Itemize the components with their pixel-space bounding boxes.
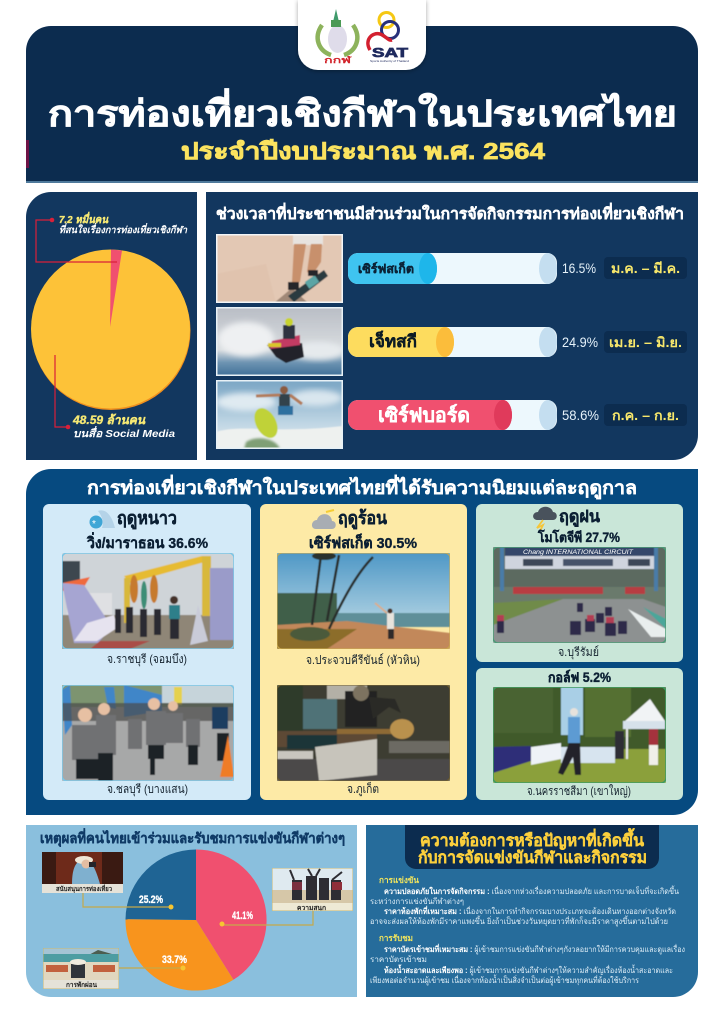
- bar: surf skate: [348, 253, 687, 284]
- text block: spectators: ราคาบัตรเข้าชมที่เหมาะสม : ผู้เข้าชมการแข่งขันกีฬาต่างๆกังวลอยากให้มีการควบคุมและดูแลเรื่อง: [384, 943, 685, 955]
- pie chart: social media interest: [31, 250, 190, 410]
- icon: SAT logo: Sports Authority of Thailand: [370, 59, 409, 63]
- bar: surfboard: 58.6%: [562, 408, 599, 423]
- card: winter: วิ่ง/มาราธอน 36.6%: [86, 532, 208, 552]
- card: summer: ฤดูร้อน: [338, 508, 388, 530]
- heading: เหตุผลที่คนไทยเข้าร่วมและรับชมการแข่งขันกีฬาต่างๆ: [40, 828, 345, 847]
- text block: competition: การแข่งขัน: [379, 875, 419, 885]
- photo: Chonburi marathon: [62, 685, 234, 781]
- title: การท่องเที่ยวเชิงกีฬาในประเทศไทย: [48, 88, 677, 134]
- bar: surf skate: เซิร์ฟสเก็ต: [358, 261, 414, 276]
- card: golf: จ.นครราชสีมา (เขาใหญ่): [527, 784, 631, 798]
- photo: Buriram circuit: [493, 547, 666, 643]
- photo: Phuket: [277, 685, 450, 781]
- bar: surfboard: ก.ค. – ก.ย.: [612, 408, 679, 423]
- card: summer: [260, 504, 467, 800]
- card: golf: [476, 668, 683, 800]
- callout: 7.2: ที่สนใจเรื่องการท่องเที่ยวเชิงกีฬา: [59, 223, 188, 236]
- callout: 7.2: [36, 211, 188, 262]
- callout: fun: 41.1%: [232, 910, 253, 922]
- callout: relaxation: การพักผ่อน: [66, 981, 97, 989]
- text block: competition: อาจจะส่งผลให้ห้องพักมีราคาแพงขึ้น ยิ่งถ้าเป็นช่วงวันหยุดยาวที่พักก็จะมีราคาสูงขึ้นตามไปด้วย: [370, 915, 668, 927]
- bar: jet ski: เม.ย. – มิ.ย.: [609, 335, 682, 350]
- photo: skateboard: [216, 234, 343, 303]
- text block: spectators: การรับชม: [379, 933, 413, 943]
- callout: relaxation: [43, 948, 187, 989]
- photo: Ratchaburi marathon: [62, 553, 234, 649]
- callout: tourism support: [42, 852, 174, 910]
- heading: กับการจัดแข่งขันกีฬาและกิจกรรม: [418, 848, 647, 867]
- card: rainy season, motoGP: ฤดูฝน: [559, 507, 600, 528]
- icon: SAT logo: SAT: [372, 46, 409, 60]
- callout: 48.59: 48.59 ล้านคน: [72, 413, 146, 427]
- card: winter: [43, 504, 251, 800]
- bar: surf skate: 16.5%: [562, 261, 596, 276]
- text block: spectators: ราคาบัตรเข้าชม: [370, 955, 427, 964]
- card: winter: จ.ราชบุรี (จอมบึง): [107, 652, 187, 667]
- bar: surfboard: [348, 400, 687, 430]
- bar: surf skate: ม.ค. – มี.ค.: [611, 261, 680, 276]
- callout: 7.2: 7.2 หมื่นคน: [59, 211, 109, 226]
- panel: header: [26, 26, 698, 183]
- panel: participation periods: [206, 192, 698, 460]
- card: summer: จ.ประจวบคีรีขันธ์ (หัวหิน): [306, 653, 420, 667]
- callout: 48.59: บนสื่อ Social Media: [73, 425, 175, 440]
- text block: spectators: [370, 933, 685, 986]
- callout: fun: [220, 868, 353, 926]
- bar: jet ski: [348, 327, 687, 357]
- heading: ช่วงเวลาที่ประชาชนมีส่วนร่วมในการจัดกิจกรรมการท่องเที่ยวเชิงกีฬา: [216, 202, 684, 223]
- text block: competition: ระหว่างการแข่งขันกีฬาต่างๆ: [370, 897, 464, 906]
- callout: fun: ความสนุก: [297, 905, 326, 912]
- panel: needs and problems: [366, 825, 698, 997]
- heading: [405, 825, 659, 869]
- text block: competition: ราคาห้องพักที่เหมาะสม : เนื่องจากในการทำกิจกรรมบางประเภทจะต้องเดินทางออกต่างจังหวัด: [384, 905, 676, 916]
- card: summer: เซิร์ฟสเก็ต 30.5%: [309, 533, 417, 552]
- photo: jet ski: [216, 307, 343, 376]
- callout: relaxation: 33.7%: [162, 954, 187, 966]
- callout: 48.59: [55, 355, 175, 440]
- card: rainy season, motoGP: โมโตจีพี 27.7%: [537, 528, 620, 545]
- card: rainy season, motoGP: [476, 504, 683, 662]
- panel: seasons: [26, 469, 698, 815]
- photo: surfboard: [216, 380, 343, 449]
- logo card: [298, 0, 426, 70]
- card: winter: จ.ชลบุรี (บางแสน): [107, 782, 188, 797]
- photo: Buriram circuit: Chang INTERNATIONAL CIRCUIT: [523, 549, 634, 556]
- icon: SAT logo: [368, 12, 409, 63]
- bar: jet ski: 24.9%: [562, 335, 598, 350]
- card: winter: ฤดูหนาว: [117, 508, 177, 530]
- photo: Hua Hin: [277, 553, 450, 649]
- text block: competition: ความปลอดภัยในการจัดกิจกรรม : เนื่องจากห่วงเรื่องความปลอดภัย และการบาดเจ็บที่จะเกิดขึ้น: [384, 885, 679, 896]
- heading: การท่องเที่ยวเชิงกีฬาในประเทศไทยที่ได้รับความนิยมแต่ละฤดูกาล: [87, 474, 637, 500]
- icon: storm cloud: [533, 507, 557, 531]
- card: summer: จ.ภูเก็ต: [347, 781, 379, 797]
- subtitle: ประจำปีงบประมาณ พ.ศ. 2564: [181, 138, 545, 164]
- bar: jet ski: เจ็ทสกี: [369, 329, 417, 351]
- text block: spectators: เพียงพอต่อจำนวนผู้เข้าชม เนื่องจากห้องน้ำเป็นสิ่งจำเป็นต่อผู้เข้าชมทุกคนที่ต้องใช้บริการ: [370, 974, 640, 986]
- icon: department emblem: กกฬ: [324, 55, 352, 65]
- panel: social media pie: [26, 192, 197, 460]
- card: rainy season, motoGP: จ.บุรีรัมย์: [558, 645, 599, 660]
- panel: reasons: [26, 825, 357, 997]
- callout: tourism support: สนับสนุนการท่องเที่ยว: [56, 883, 112, 893]
- photo: Khao Yai golf: [493, 687, 666, 783]
- text block: spectators: ห้องน้ำสะอาดและเพียงพอ : ผู้เข้าชมการแข่งขันกีฬาต่างๆให้ความสำคัญเรื่องห้องน้ำสะอาดและ: [384, 964, 673, 976]
- callout: tourism support: 25.2%: [139, 894, 163, 906]
- icon: snow: *: [92, 519, 96, 530]
- text block: competition: [370, 875, 679, 927]
- card: golf: กอล์ฟ 5.2%: [548, 669, 611, 685]
- icon: snow: [90, 510, 115, 530]
- icon: sun and cloud: [312, 510, 336, 529]
- heading: ความต้องการหรือปัญหาที่เกิดขึ้น: [420, 828, 645, 851]
- pie chart: reasons: [125, 849, 267, 991]
- bar: surfboard: เซิร์ฟบอร์ด: [378, 404, 470, 427]
